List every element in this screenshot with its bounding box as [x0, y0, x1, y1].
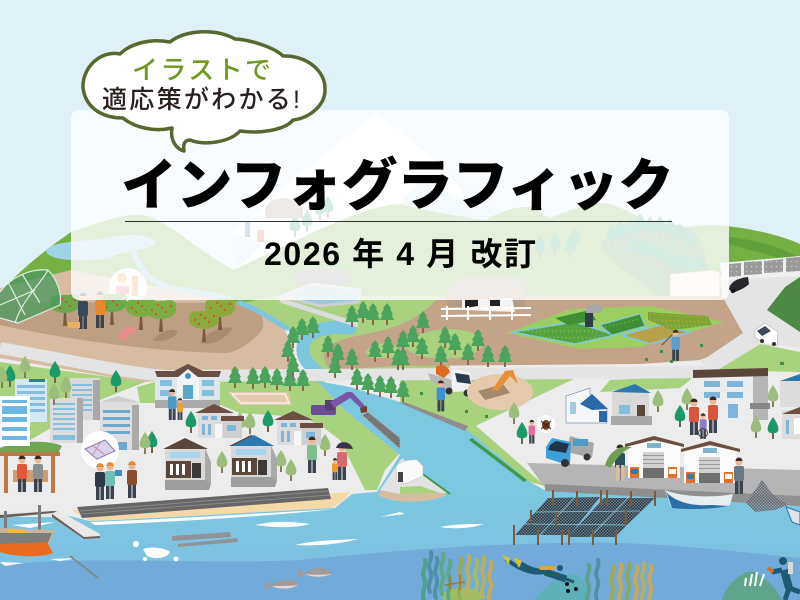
- river island with small building: [378, 458, 450, 502]
- excavator: [311, 392, 367, 415]
- forest on the hills: [290, 196, 720, 298]
- terraced white retaining wall: [670, 270, 720, 297]
- man carrying seaweed: [605, 444, 632, 481]
- fishing boat: [0, 505, 55, 556]
- warehouses: [625, 436, 740, 483]
- breakwater beach: [72, 492, 350, 521]
- white foam on water: [0, 509, 484, 566]
- orchard trees: [50, 293, 235, 342]
- breakwater: [77, 488, 331, 518]
- rock and seaweed centre: [535, 560, 651, 600]
- family walking near school: [168, 389, 183, 420]
- far right houses: [780, 374, 800, 439]
- rice paddies: [507, 306, 724, 349]
- small weeds: [420, 344, 784, 418]
- swimming diver: [502, 555, 574, 582]
- mountain lodge and skier: [245, 198, 303, 242]
- bubble line one: イラストで: [132, 55, 271, 85]
- black car: [729, 277, 749, 293]
- town right trees: [509, 385, 778, 444]
- pond and mountain stream: [46, 235, 232, 300]
- deep sea: [0, 542, 800, 600]
- diver with camera: [768, 557, 800, 600]
- mountain: [230, 113, 560, 290]
- salmon: [265, 568, 333, 590]
- green roof bus shelter with people: [0, 442, 62, 493]
- floating stick: [70, 556, 98, 578]
- seaweed bed left: [423, 552, 491, 600]
- sports field: [228, 392, 292, 405]
- left buildings: [0, 378, 139, 450]
- town ground: [0, 340, 800, 525]
- bubble line two: 適応策がわかる!: [102, 86, 300, 114]
- centre farm barn: [443, 277, 530, 307]
- green hills: [0, 203, 800, 320]
- houses in left town: [163, 404, 323, 490]
- care workers and wheelchair: [689, 396, 718, 439]
- green ground patches: [0, 296, 695, 490]
- school: [155, 364, 221, 408]
- translucent title panel: [71, 110, 729, 300]
- orchard farmers: [68, 292, 136, 340]
- seawall right bank: [400, 402, 468, 431]
- blue truck: [546, 436, 594, 467]
- wharf: [527, 463, 800, 506]
- map in white circle: [81, 431, 119, 469]
- second small boat: [786, 507, 800, 525]
- dairy cow and white fence: [441, 298, 531, 320]
- main road: [0, 348, 730, 376]
- beach visitors with parasol: [307, 436, 353, 480]
- right houses: [566, 384, 652, 425]
- water treatment facility: [280, 268, 360, 325]
- coral rock right: [722, 571, 782, 600]
- title rule: [125, 221, 672, 222]
- greenhouse: [0, 270, 60, 323]
- aquaculture rafts: [513, 490, 656, 545]
- roadside product circle: [109, 268, 147, 306]
- revision date: 2026 年 4 月 改訂: [264, 236, 536, 272]
- centre groves: [281, 301, 512, 402]
- green bank edge: [469, 438, 527, 482]
- sea: [0, 490, 800, 600]
- green roadside trees: [0, 356, 398, 481]
- lower river: [317, 381, 548, 530]
- white van: [755, 323, 778, 346]
- playground with slide: [467, 370, 533, 410]
- speech bubble: [83, 32, 325, 151]
- small boat: [665, 490, 733, 509]
- light tan field band: [0, 270, 295, 382]
- retaining wall: [720, 256, 800, 280]
- seawall on river: [362, 412, 400, 449]
- orange tank truck: [428, 365, 473, 396]
- pier: [0, 510, 100, 539]
- apartment building with brown roof: [693, 368, 770, 420]
- farm worker spraying: [437, 380, 445, 411]
- centre brown farmland: [324, 296, 743, 370]
- upper river: [240, 303, 350, 374]
- orchard brown field: [0, 302, 263, 353]
- fisherman: [734, 458, 744, 494]
- girl with tick warning: [529, 415, 555, 444]
- right lawn: [718, 344, 800, 372]
- right upper road and dark hill: [700, 265, 800, 372]
- main title: インフォグラフィック: [121, 154, 674, 217]
- paddy farmers: [585, 304, 680, 361]
- oyster rafts: [172, 532, 238, 547]
- fishing net: [746, 480, 788, 512]
- lawn under tree groves: [365, 329, 483, 358]
- surveyors in hard hats: [95, 462, 137, 500]
